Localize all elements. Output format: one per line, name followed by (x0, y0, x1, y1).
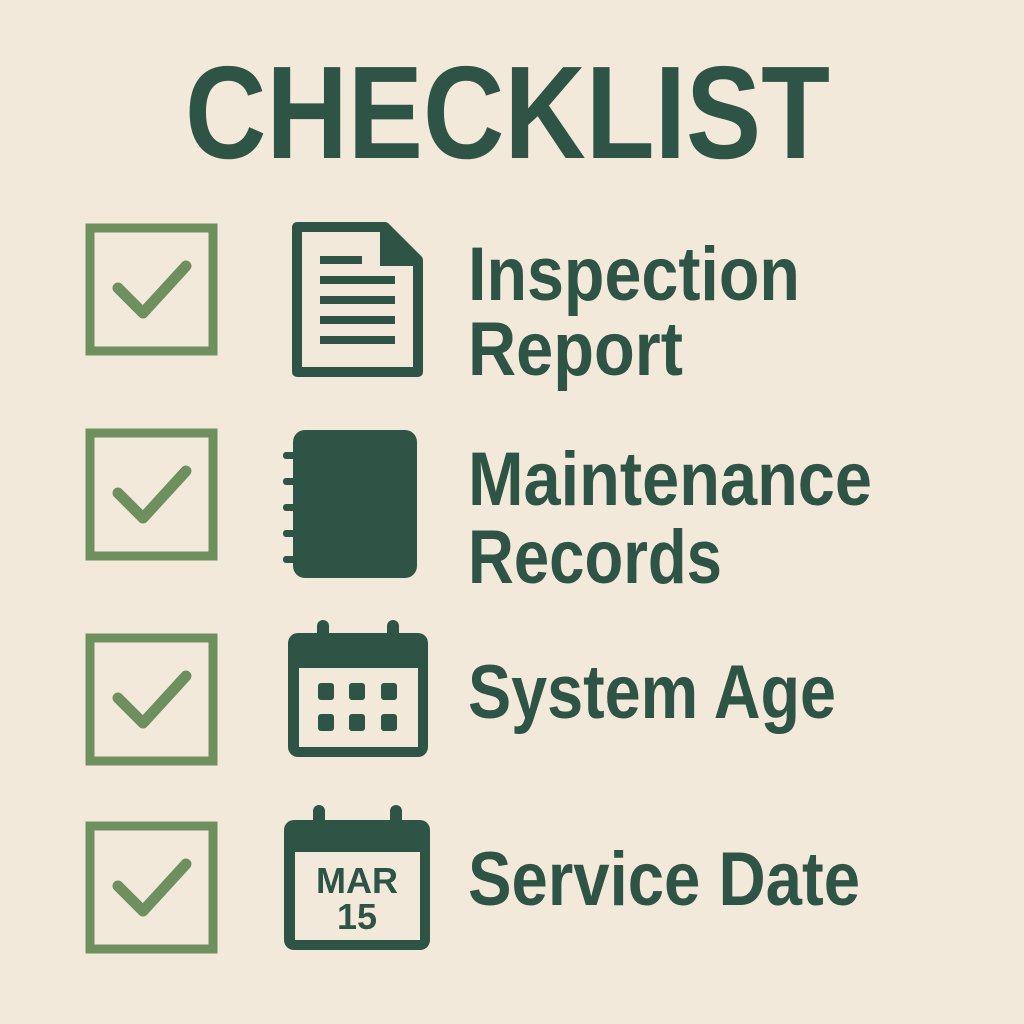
label: maintenance records: Maintenance (468, 437, 872, 522)
label: maintenance records (468, 437, 872, 600)
row 1: inspection report (90, 227, 800, 392)
icon: notebook (283, 430, 417, 578)
checkbox 3 (90, 638, 213, 761)
label: inspection report: Report (468, 307, 683, 392)
icon: document (297, 227, 418, 372)
label: service date: Service Date (468, 837, 860, 922)
label: inspection report (468, 232, 800, 392)
checkbox 2 (90, 433, 213, 556)
row 4: service date (90, 805, 860, 950)
title: CHECKLIST (185, 39, 830, 186)
label: maintenance records: Records (468, 515, 722, 600)
label: system age: System Age (468, 650, 836, 735)
row 3: system age (90, 620, 836, 761)
icon: calendar MAR 15 (284, 805, 430, 950)
checkbox 1 (90, 228, 213, 351)
label: inspection report: Inspection (468, 232, 800, 317)
icon: calendar grid (288, 620, 428, 757)
icon: calendar MAR 15: MAR (316, 860, 398, 901)
icon: calendar MAR 15: 15 (337, 896, 377, 937)
checkbox 4 (90, 826, 213, 949)
row 2: maintenance records (90, 430, 872, 600)
